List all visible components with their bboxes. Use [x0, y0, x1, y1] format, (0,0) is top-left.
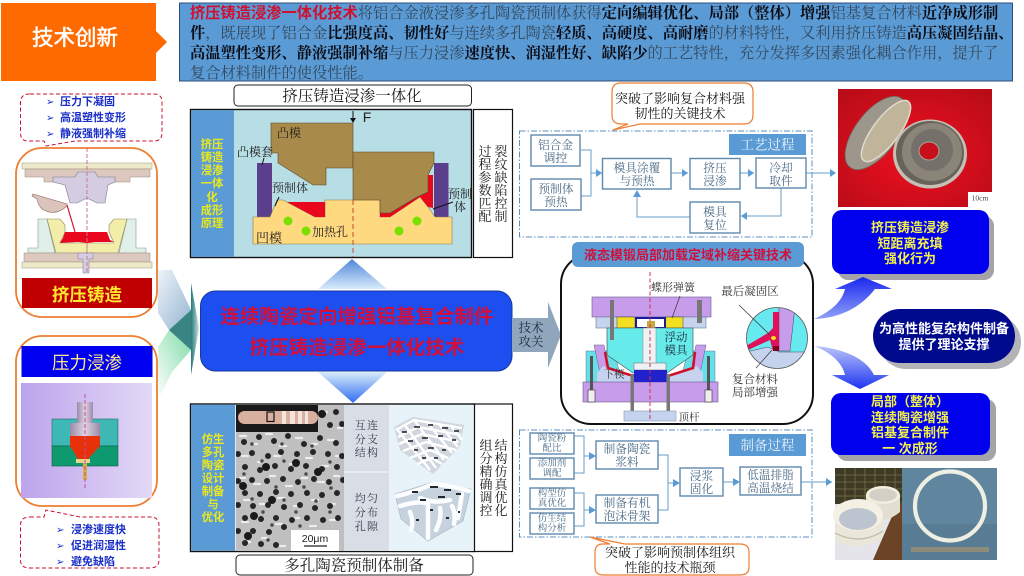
- conclusion oval: 提供了理论支撑: [898, 336, 990, 352]
- panel: local loading technology: [561, 242, 813, 424]
- side note: process parameter matching: 配: [478, 208, 492, 224]
- label: 制备过程: 制备过程: [740, 438, 795, 453]
- callout: key technology strength: 韧性的关键技术: [634, 106, 726, 120]
- side note: structure simulation optimization: 化: [494, 502, 508, 518]
- step: alloy control: 调控: [544, 150, 567, 164]
- pressure infiltration diagram: [21, 383, 152, 498]
- side note: process parameter matching: 控: [494, 196, 508, 210]
- summary text panel: 件，既展现了铝合金比强度高、韧性好与连续多孔陶瓷轻质、高硬度、高耐磨的材料特性，又利用挤压铸造高压凝固结晶、: [190, 24, 1014, 42]
- side label: forming principle: [191, 110, 234, 257]
- side label: forming principle: 化: [206, 190, 218, 204]
- callout: preform bottleneck: [590, 537, 749, 575]
- die cross-section: 浮动: [664, 330, 688, 344]
- arrow: two processes merge into central technology: [158, 270, 199, 400]
- step: debinding and sintering: 高温烧结: [747, 480, 794, 494]
- result box: short-range filling: 挤压铸造浸渗: [871, 220, 949, 234]
- step: organic foam skeleton: [596, 495, 658, 523]
- step: preform preheating: 预热: [544, 194, 568, 208]
- 3D lattice and foam models: [389, 405, 474, 551]
- step: slurry impregnation curing: 浸浆: [690, 468, 713, 482]
- callout: preform bottleneck: 突破了影响预制体组织: [605, 544, 736, 560]
- step: squeeze infiltration: 浸渗: [703, 174, 727, 188]
- title: 挤压铸造浸渗一体化: 挤压铸造浸渗一体化: [282, 87, 422, 105]
- step: structure simulation: [530, 487, 574, 509]
- step: biomimetic structure analysis: 构分析: [538, 522, 567, 534]
- step: slurry impregnation curing: [680, 468, 723, 496]
- arrow: technical breakthrough: [512, 302, 561, 368]
- summary text panel: [180, 3, 1014, 82]
- die cross-section: 下模: [604, 368, 625, 380]
- step: biomimetic structure analysis: 仿生结: [538, 512, 567, 524]
- result box: short-range filling: 强化行为: [884, 250, 936, 266]
- panel: squeeze casting: [16, 148, 157, 317]
- side note: process parameter matching: 裂: [494, 144, 508, 158]
- flowchart: preparation: [520, 430, 832, 537]
- step: cooling and removal: 冷却: [769, 160, 793, 174]
- side note: process parameter matching: 陷: [494, 182, 508, 198]
- side label: forming principle: 挤压: [201, 137, 223, 151]
- side label: porous ceramic design: 多孔: [202, 445, 225, 459]
- step: squeeze infiltration: 挤压: [703, 160, 727, 174]
- arrow: down triangle: [318, 372, 387, 403]
- callout: pressure infiltration features: ➢: [56, 557, 64, 568]
- side note: process parameter matching: 纹: [494, 156, 508, 172]
- detail circle: final solidification zone: 复合材料: [732, 372, 778, 386]
- die cross-section: 蝶形弹簧: [651, 280, 696, 294]
- side label: porous ceramic design: 仿生: [202, 432, 224, 446]
- step: cooling and removal: 取件: [769, 174, 793, 188]
- side label: porous ceramic design: 制备: [202, 484, 225, 498]
- step: ceramic powder ratio: 配比: [542, 442, 562, 454]
- step: biomimetic structure analysis: [530, 512, 574, 534]
- callout: squeeze casting features: ➢: [46, 97, 54, 108]
- side note: process parameter matching: 匹: [478, 196, 492, 210]
- callout: squeeze casting features: ➢: [46, 113, 54, 124]
- side note: structure simulation optimization: 结: [494, 438, 508, 452]
- die cross-section: [583, 272, 718, 424]
- result box: one-step forming: 铝基复合制件: [871, 424, 949, 440]
- label: 制备过程: [729, 434, 806, 456]
- side note: structure simulation optimization: 优: [494, 490, 508, 504]
- side note: structure simulation optimization: 分: [479, 450, 493, 466]
- central title box: 连续陶瓷定向增强铝基复合制件: [220, 305, 494, 328]
- die schematic: [237, 109, 472, 257]
- detail circle: final solidification zone: 局部增强: [732, 386, 778, 399]
- die cross-section: 模具: [664, 343, 688, 357]
- structure labels: 分支: [355, 432, 379, 446]
- step: additive preparation: 调配: [542, 468, 562, 479]
- callout: key technology strength: [612, 83, 753, 130]
- heading: 液态模锻局部加载定域补缩关键技术: [572, 242, 804, 267]
- side note: structure simulation optimization: 真: [494, 476, 508, 492]
- result box: one-step forming: 连续陶瓷增强: [871, 410, 949, 424]
- side label: porous ceramic design: 陶瓷: [202, 458, 224, 472]
- step: die reset: 复位: [703, 218, 727, 232]
- label band: 压力浸渗: 压力浸渗: [52, 353, 122, 373]
- side note: process parameter matching: 参: [478, 170, 492, 184]
- step: ceramic slurry: [596, 441, 658, 469]
- die schematic: 预制: [448, 186, 472, 201]
- side note: structure simulation optimization: 控: [479, 502, 493, 518]
- side label: forming principle: 铸造: [201, 150, 224, 164]
- callout: squeeze casting features: 压力下凝固: [60, 94, 115, 108]
- side note: structure simulation optimization: 调: [479, 490, 493, 504]
- photo: cast composite discs: 10cm: [972, 194, 988, 202]
- panel: biomimetic porous ceramic design: [190, 404, 474, 552]
- step: preform preheating: 预制体: [538, 182, 574, 196]
- title: 多孔陶瓷预制体制备: 多孔陶瓷预制体制备: [284, 556, 424, 574]
- label band: 挤压铸造: 挤压铸造: [52, 285, 122, 305]
- structure labels: 互连: [355, 419, 379, 432]
- die schematic: 凸模套: [237, 144, 273, 159]
- side note: structure simulation optimization: [474, 404, 512, 552]
- step: ceramic slurry: 制备陶瓷: [604, 442, 651, 456]
- photo: cast composite discs: [833, 86, 992, 207]
- result box: short-range filling: [832, 210, 994, 280]
- die schematic: 预制体: [272, 180, 308, 195]
- side note: structure simulation optimization: 构: [494, 450, 508, 466]
- die schematic: 凸模: [277, 125, 301, 140]
- side label: porous ceramic design: [191, 405, 235, 551]
- heading: 液态模锻局部加载定域补缩关键技术: 液态模锻局部加载定域补缩关键技术: [584, 248, 792, 262]
- step: ceramic powder ratio: [530, 432, 574, 454]
- structure labels: 孔隙: [355, 519, 379, 533]
- structure labels: [344, 405, 389, 551]
- structure labels: 均匀: [355, 491, 379, 505]
- micrograph of porous ceramic: 20μm: [302, 533, 328, 545]
- side label: porous ceramic design: 与: [207, 498, 219, 511]
- callout: pressure infiltration features: [20, 510, 159, 568]
- callout: pressure infiltration features: 避免缺陷: [71, 554, 115, 568]
- header tag: 技术创新: [1, 3, 167, 81]
- step: ceramic powder ratio: 陶瓷粉: [538, 432, 567, 444]
- central title box: [200, 291, 512, 371]
- side note: process parameter matching: 程: [478, 156, 492, 172]
- die schematic: 体: [454, 199, 466, 214]
- die cross-section: 顶杆: [678, 410, 700, 424]
- label band: 压力浸渗: [22, 346, 152, 377]
- step: cooling and removal: [756, 158, 806, 188]
- arrow: curved down to result: [814, 346, 889, 389]
- result box: short-range filling: 短距离充填: [877, 236, 943, 250]
- step: ceramic slurry: 浆料: [615, 454, 639, 468]
- callout: pressure infiltration features: ➢: [56, 541, 64, 552]
- result box: one-step forming: 局部（整体）: [871, 394, 949, 408]
- side label: porous ceramic design: 优化: [202, 510, 224, 524]
- side note: structure simulation optimization: 组: [479, 438, 493, 452]
- step: die coating and preheating: 与预热: [619, 174, 655, 188]
- summary text panel: 挤压铸造浸渗一体化技术将铝合金液浸渗多孔陶瓷预制体获得定向编辑优化、局部（整体）增强铝基复合材料近净成形制: [190, 4, 998, 22]
- side label: forming principle: 浸渗: [201, 163, 224, 177]
- arrow: technical breakthrough: 攻关: [518, 335, 544, 349]
- conclusion oval: 为高性能复杂构件制备: [879, 320, 1009, 336]
- side label: forming principle: 原理: [201, 217, 223, 230]
- panel: pressure infiltration: [16, 336, 157, 506]
- micrograph of porous ceramic: [236, 405, 344, 551]
- step: preform preheating: [531, 179, 581, 210]
- result box: one-step forming: 一 次成形: [882, 440, 938, 456]
- side note: process parameter matching: [474, 110, 512, 258]
- summary text panel: 高温塑性变形、静液强制补缩与压力浸渗速度快、润湿性好、缺陷少的工艺特性，充分发挥多因素强化耦合作用，提升了: [190, 44, 998, 62]
- side note: structure simulation optimization: 仿: [494, 464, 508, 478]
- step: structure simulation: 真优化: [538, 497, 567, 509]
- callout: squeeze casting features: [20, 94, 162, 146]
- side label: porous ceramic design: 设计: [202, 471, 224, 485]
- callout: pressure infiltration features: 浸渗速度快: [71, 522, 126, 536]
- callout: squeeze casting features: 静液强制补缩: [60, 126, 126, 140]
- die schematic: 凹模: [256, 230, 282, 246]
- step: debinding and sintering: 低温排脂: [747, 468, 794, 482]
- side note: structure simulation optimization: 确: [479, 476, 493, 492]
- side note: process parameter matching: 制: [494, 208, 508, 224]
- side label: forming principle: 成形: [201, 203, 223, 217]
- summary text panel: 复合材料制件的使役性能。: [190, 65, 373, 82]
- arrow: up triangle: [318, 259, 387, 289]
- step: die coating and preheating: [602, 158, 671, 189]
- title: 多孔陶瓷预制体制备: [236, 555, 473, 575]
- step: additive preparation: 添加剂: [538, 457, 566, 469]
- side label: forming principle: 一体: [201, 176, 224, 190]
- label: 工艺过程: 工艺过程: [740, 138, 795, 152]
- step: die coating and preheating: 模具涂覆: [614, 160, 661, 174]
- step: structure simulation: 构型仿: [538, 487, 567, 499]
- die schematic: 加热孔: [312, 224, 348, 239]
- die schematic: F: [363, 109, 371, 125]
- step: die reset: 模具: [703, 204, 728, 218]
- side note: process parameter matching: 过: [478, 144, 492, 158]
- step: debinding and sintering: [740, 467, 801, 495]
- detail circle: final solidification zone: 最后凝固区: [721, 284, 779, 298]
- result box: one-step forming: [831, 393, 996, 461]
- title: 挤压铸造浸渗一体化: [234, 85, 472, 106]
- step: organic foam skeleton: 制备有机: [604, 496, 651, 510]
- central title box: 挤压铸造浸渗一体化技术: [250, 336, 465, 359]
- structure labels: 分布: [355, 505, 379, 519]
- step: additive preparation: [530, 457, 574, 479]
- step: alloy control: 铝合金: [538, 138, 573, 152]
- conclusion oval: [873, 309, 1021, 369]
- flowchart: process: [520, 131, 836, 237]
- panel: forming principle: [190, 109, 472, 258]
- callout: pressure infiltration features: ➢: [56, 525, 64, 536]
- squeeze casting die diagram: [22, 148, 152, 273]
- side note: structure simulation optimization: 精: [479, 464, 493, 478]
- callout: pressure infiltration features: 促进润湿性: [71, 538, 126, 552]
- step: alloy control: [531, 135, 580, 166]
- arrow: technical breakthrough: 技术: [518, 320, 544, 335]
- label band: 挤压铸造: [22, 278, 152, 308]
- callout: squeeze casting features: 高温塑性变形: [60, 110, 126, 124]
- structure labels: 结构: [355, 445, 379, 459]
- step: die reset: [690, 202, 740, 233]
- photo: ceramic preforms: [833, 468, 997, 560]
- step: organic foam skeleton: 泡沫骨架: [604, 508, 651, 522]
- header tag: 技术创新: 技术创新: [32, 26, 118, 50]
- label: 工艺过程: [729, 134, 806, 155]
- callout: preform bottleneck: 性能的技术瓶颈: [624, 560, 716, 574]
- detail circle: final solidification zone: [721, 284, 810, 399]
- step: squeeze infiltration: [690, 158, 740, 189]
- callout: squeeze casting features: ➢: [46, 129, 54, 140]
- side note: process parameter matching: 数: [478, 182, 492, 198]
- side note: process parameter matching: 缺: [494, 170, 508, 184]
- step: slurry impregnation curing: 固化: [690, 482, 713, 496]
- callout: key technology strength: 突破了影响复合材料强: [615, 90, 746, 106]
- arrow: curved up to result: [814, 277, 892, 319]
